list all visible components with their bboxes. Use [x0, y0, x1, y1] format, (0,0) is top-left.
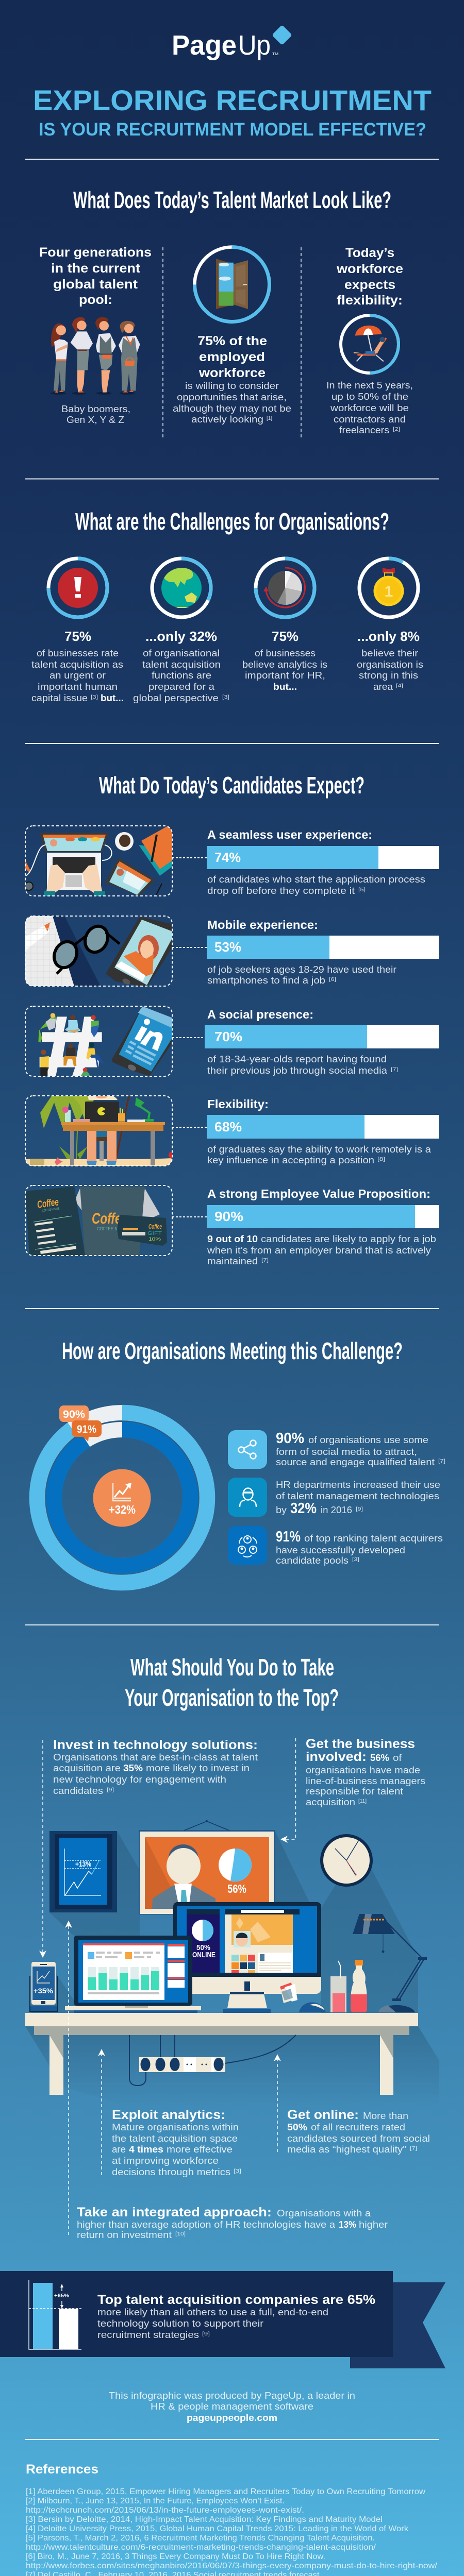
reference list: http://www.talentculture.com/6-recruitment-marketing-trends-changing-talent-acquisition/ — [26, 2543, 376, 2552]
flexibility text: up to 50% of the — [332, 392, 408, 402]
text: HR 32%: HR departments increased their use — [276, 1480, 440, 1490]
icon: pie chart ring — [256, 558, 314, 617]
75% text: an urgent or — [49, 670, 106, 681]
text: get online: candidates sourced from social — [287, 2133, 430, 2144]
text: get online: 50% — [287, 2122, 307, 2132]
heading: to the top: What Should You Do to Take — [130, 1654, 334, 1681]
illustration: coffee brand: Coffee — [92, 1210, 128, 1227]
monitor: ONLINE — [192, 1951, 216, 1959]
center badge: +32%: +32% — [109, 1503, 136, 1516]
75% analytics text: believe analytics is — [242, 659, 327, 670]
text: 91% pools: candidate pools — [276, 1555, 349, 1566]
text: EVP: maintained — [207, 1256, 258, 1266]
icon: wall clock — [322, 1836, 371, 1885]
reference list: [5] Parsons, T., March 2, 2016, 6 Recruitment Marketing Trends Changing Talent Acquisition. — [26, 2534, 375, 2543]
text: flexibility: [8] — [377, 1157, 385, 1162]
text: get online — [287, 2108, 430, 2155]
only 32% text: [3] — [222, 694, 229, 700]
text: exploit analytics — [112, 2108, 241, 2177]
illustration: coffee brand: GIFT — [147, 1231, 162, 1236]
only 32% text: of organisational — [143, 648, 220, 658]
text: get the business involved: organisations have made — [306, 1765, 420, 1775]
text: banner: more likely than all others to use a full, end-to-end — [97, 2307, 328, 2317]
callout: 91%: 91% — [77, 1423, 96, 1435]
stat: social media 90% — [228, 1430, 445, 1469]
text: invest in technology: acquisition are — [53, 1763, 121, 1773]
text: HR 32%: by — [276, 1505, 287, 1515]
75% analytics text — [242, 629, 327, 692]
arrow: business to portrait — [280, 1738, 296, 1843]
illustration: coffee brand: Coffee — [148, 1223, 162, 1230]
text: get online: [7] — [410, 2146, 417, 2151]
logo: PageUp — [172, 25, 292, 61]
text: integrated approach: Organisations with a — [277, 2208, 371, 2218]
heading: to the top: Your Organisation to the Top? — [125, 1684, 339, 1711]
75% text: 75% — [64, 629, 91, 644]
text: HR 32%: of talent management technologies — [276, 1491, 439, 1501]
flexibility text: contractors and — [334, 414, 406, 425]
section: meeting the challenge — [37, 1337, 445, 1583]
text: 90% social: 90% — [276, 1430, 304, 1447]
text: invest in technology: more likely to invest in — [146, 1763, 250, 1773]
phone on dock — [29, 1962, 58, 2012]
text: 91% pools: [3] — [352, 1557, 359, 1563]
heading: references: References — [26, 2462, 98, 2477]
employed workforce text: workforce — [198, 366, 266, 380]
text: invest in technology: candidates — [53, 1786, 103, 1796]
text: 90% social: form of social media to attract, — [276, 1447, 417, 1457]
icon: desk lamp — [353, 1914, 427, 2012]
text: get the business involved: Get the business — [306, 1737, 415, 1751]
text: HR 32% — [276, 1480, 440, 1517]
icon: medal ring: 1 — [385, 583, 393, 600]
four generations text — [39, 245, 152, 307]
75% analytics text: of businesses — [255, 648, 316, 658]
subtitle: IS YOUR RECRUITMENT MODEL EFFECTIVE? — [39, 120, 426, 140]
text: exploit analytics: Mature organisations within — [112, 2122, 239, 2132]
text: 90% social: [7] — [438, 1459, 445, 1464]
text: seamless: of candidates who start the application process — [207, 874, 425, 885]
text: exploit analytics: the talent acquisition space — [112, 2133, 238, 2144]
bar: 53%: 53% — [214, 939, 241, 955]
panel: employed workforce — [173, 247, 291, 425]
75% text: capital issue — [31, 693, 88, 703]
text: flexibility — [207, 1144, 432, 1165]
four generations text: global talent — [53, 277, 138, 292]
employed workforce text: although they may not be — [173, 403, 291, 414]
text: get the business involved: [11] — [358, 1799, 367, 1804]
heading: to the top — [125, 1654, 339, 1711]
text: get the business involved: acquisition — [306, 1797, 355, 1807]
heading: mobile: Mobile experience: — [207, 918, 318, 931]
icon: person with glasses — [228, 1478, 267, 1517]
heading: seamless: A seamless user experience: — [207, 828, 372, 841]
employed workforce text: 75% of the — [197, 334, 267, 348]
text: get online: More than — [363, 2111, 408, 2121]
only 32% text: functions are — [152, 670, 211, 681]
icon: share — [228, 1430, 267, 1469]
illustration: glasses and phone — [25, 916, 175, 987]
header: logo and title — [33, 25, 432, 140]
stat: candidate pools 91% — [228, 1526, 443, 1566]
arrow: analytics to laptop — [98, 2049, 105, 2176]
monitor: 50% — [196, 1943, 210, 1952]
text: mobile: of job seekers ages 18-29 have used their — [207, 964, 396, 975]
illustration: coffee brand: Coffee — [37, 1196, 59, 1211]
text: banner — [97, 2293, 375, 2340]
flexibility text: [2] — [393, 427, 400, 432]
reference list: http://techcrunch.com/2015/06/13/in-the-future-employees-wont-exist/. — [26, 2506, 304, 2515]
flexibility heading: expects — [344, 278, 395, 292]
generations caption: Gen X, Y & Z — [67, 415, 124, 425]
power strip and cables — [129, 2035, 296, 2086]
illustration: coffee brand: COFFEE HOUSE — [42, 1207, 60, 1213]
text: invest in technology: Invest in technology solutions: — [53, 1738, 258, 1752]
75% text: important human — [38, 682, 118, 692]
text: exploit analytics: [3] — [234, 2168, 241, 2174]
arrow: online to cable — [274, 2054, 281, 2154]
icon: globe ring — [152, 558, 211, 617]
text: flexibility: key influence in accepting a position — [207, 1155, 374, 1165]
references — [26, 2462, 438, 2576]
75% analytics text: 75% — [272, 629, 299, 644]
text: exploit analytics: Exploit analytics: — [112, 2108, 225, 2122]
illustration: beach desk — [25, 1093, 176, 1166]
bar: 74% — [207, 846, 439, 869]
flexibility text: In the next 5 years, — [326, 380, 413, 391]
heading: EVP: A strong Employee Value Proposition: — [207, 1187, 430, 1200]
illustration: laptop on desk — [25, 826, 172, 896]
75% text: but... — [101, 693, 124, 703]
desk items: mouse, drink, bottle — [280, 1960, 367, 2012]
row: mobile experience — [25, 916, 439, 987]
reference list: [1] Aberdeen Group, 2015, Empower Hiring Managers and Recruiters Today to Own Recruiting Tomorrow — [26, 2487, 425, 2496]
bar: 90%: 90% — [214, 1209, 243, 1224]
text: seamless: [5] — [358, 887, 366, 893]
row: flexibility — [25, 1093, 439, 1166]
text: HR 32%: 32% — [290, 1500, 317, 1517]
employed workforce text: [1] — [267, 416, 272, 421]
employed workforce text: actively looking — [191, 414, 263, 425]
section: take your organisation to the top — [25, 1654, 439, 2240]
only 32% text: talent acquisition — [142, 659, 221, 670]
row: seamless user experience — [25, 826, 439, 896]
text: HR 32%: in 2016 — [321, 1505, 352, 1515]
icon: beach chair in ring — [341, 315, 399, 373]
text: banner: recruitment strategies — [97, 2330, 199, 2340]
only 32% text: global perspective — [133, 693, 219, 703]
text: get the business involved: line-of-business managers — [306, 1776, 425, 1786]
text: get online: media as “highest quality” — [287, 2144, 406, 2155]
bar: 74%: 74% — [214, 850, 241, 865]
callout: 91% — [72, 1420, 102, 1442]
text: 91% pools — [276, 1529, 443, 1566]
text: seamless — [207, 874, 425, 896]
75% text: of businesses rate — [37, 648, 119, 658]
phone on dock: +35% — [34, 1987, 54, 1995]
text: integrated approach: Take an integrated approach: — [77, 2205, 272, 2219]
text: EVP — [207, 1234, 436, 1266]
illustration: coffee brand: 10% — [148, 1236, 161, 1242]
only 8% text: [4] — [396, 683, 403, 689]
employed workforce text: is willing to consider — [185, 381, 279, 391]
stat: 75% analytics — [242, 558, 327, 692]
stat: only 8% — [357, 558, 423, 692]
only 8% text: organisation is — [357, 659, 423, 670]
text: social: of 18-34-year-olds report having found — [207, 1054, 387, 1064]
only 32% text: ...only 32% — [145, 629, 217, 644]
four generations text: in the current — [51, 261, 141, 276]
chart: +65% bars: +65% — [54, 2293, 70, 2299]
stat: 75% urgent issue — [31, 558, 124, 703]
illustration: hashtag and phone — [25, 1006, 174, 1076]
reference list: [6] Biro, M., June 7, 2016, 3 Things Every Company Must Do To Hire Right Now. — [26, 2552, 325, 2561]
text: invest in technology: [9] — [107, 1787, 114, 1793]
text: get online: of all recruiters rated — [311, 2122, 405, 2132]
text: integrated approach: [10] — [175, 2231, 186, 2237]
text: 91% pools: have successfully developed — [276, 1545, 405, 1555]
reference list: http://www.forbes.com/sites/meghanbiro/2016/06/07/3-things-every-company-must-do-to-hire-right-now/ — [26, 2562, 438, 2570]
four generations text: pool: — [79, 293, 112, 307]
text: invest in technology: Organisations that are best-in-class at talent — [53, 1752, 258, 1762]
text: banner: technology solution to support their — [97, 2318, 263, 2329]
text: invest in technology — [53, 1738, 258, 1796]
reference list: [4] Deloitte University Press, 2015, Global Human Capital Trends 2015: Leading in the World of Work — [26, 2524, 409, 2533]
illustration: coffee brand: COFFEE N — [97, 1226, 118, 1231]
title: EXPLORING RECRUITMENT — [33, 84, 432, 116]
icon: open door in ring — [195, 247, 269, 321]
text: mobile: smartphones to find a job — [207, 975, 325, 986]
employed workforce text — [173, 334, 291, 425]
text: integrated approach: 13% — [339, 2219, 356, 2230]
text: social: [7] — [391, 1067, 398, 1073]
text: mobile: [6] — [329, 977, 336, 982]
icon: four women — [51, 317, 140, 395]
bar: 53% — [207, 936, 439, 959]
text: get the business involved: of — [393, 1753, 402, 1763]
text: exploit analytics: more effective — [167, 2144, 233, 2155]
text: banner: [9] — [202, 2331, 210, 2337]
75% text: talent acquisition as — [31, 659, 123, 670]
75% text: [3] — [91, 694, 98, 700]
banner: top talent companies — [0, 2271, 445, 2368]
reference list: [3] Bersin by Deloitte, 2014, High-Impact Talent Acquisition: Key Findings and Maturity Model — [26, 2515, 383, 2524]
reference list — [26, 2487, 438, 2576]
laptop — [65, 1936, 201, 2013]
text: invest in technology: new technology for engagement with — [53, 1774, 226, 1785]
text: social — [207, 1054, 398, 1076]
bar: 70%: 70% — [214, 1029, 242, 1044]
icon: people cycle — [228, 1526, 267, 1565]
flexibility text: freelancers — [339, 425, 389, 435]
center badge: +32% — [93, 1469, 151, 1527]
producer credit — [109, 2391, 355, 2423]
logo: PageUp: Up — [238, 30, 271, 61]
only 32% text: prepared for a — [148, 682, 215, 692]
frame: growth chart — [49, 1831, 117, 1912]
text: exploit analytics: decisions through metrics — [112, 2167, 230, 2177]
text: 91% pools: 91% — [276, 1529, 301, 1545]
only 32% text — [133, 629, 229, 703]
producer credit: This infographic was produced by PageUp, a leader in — [109, 2391, 355, 2401]
text: banner: Top talent acquisition companies are 65% — [97, 2293, 375, 2307]
text: 91% pools: of top ranking talent acquirers — [304, 1533, 443, 1544]
text: exploit analytics: 4 times — [129, 2144, 163, 2155]
icon: exclamation ring — [48, 558, 107, 617]
generations caption: Baby boomers, — [61, 404, 130, 414]
75% analytics text: important for HR, — [245, 670, 325, 681]
text: get online: Get online: — [287, 2108, 359, 2122]
text: EVP: candidates are likely to apply for a job — [261, 1234, 436, 1244]
reference list: [2] Milbourn, T., June 13, 2015, In the Future, Employees Won’t Exist. — [26, 2497, 285, 2505]
text: 90% social: source and engage qualified talent — [276, 1457, 435, 1467]
row: social presence — [25, 1006, 439, 1076]
bar: 70% — [205, 1025, 439, 1048]
frame: portrait with 56% pie: 56% — [227, 1882, 246, 1895]
row: employee value proposition — [25, 1185, 439, 1266]
text: get the business involved — [306, 1737, 425, 1807]
flexibility text — [326, 380, 413, 435]
text: 90% social: of organisations use some — [308, 1435, 428, 1445]
chart: donut 90% and 91% — [37, 1405, 207, 1583]
text: HR 32%: [9] — [356, 1506, 363, 1512]
text: integrated approach: higher than average adoption of HR technologies have a — [77, 2219, 336, 2230]
text: get the business involved: 56% — [370, 1753, 389, 1763]
frame: growth chart: +13% — [75, 1860, 91, 1869]
callout: 90%: 90% — [63, 1409, 85, 1420]
text: seamless: drop off before they complete it — [207, 886, 355, 896]
text: 90% social — [276, 1430, 445, 1467]
section: candidates expect — [25, 772, 439, 1266]
bar: 90% — [207, 1205, 439, 1228]
illustration: coffee brand — [25, 1185, 172, 1256]
text: social: their previous job through social media — [207, 1065, 388, 1076]
75% analytics text: but... — [273, 682, 297, 692]
only 8% text: strong in this — [359, 670, 418, 681]
text: exploit analytics: at improving workforce — [112, 2156, 219, 2166]
text: get the business involved: involved: — [306, 1750, 367, 1764]
flexibility heading: flexibility: — [337, 293, 403, 308]
chart: +65% bars — [29, 2280, 81, 2349]
stat: only 32% — [133, 558, 229, 703]
producer credit: pageuppeople.com — [187, 2413, 277, 2423]
text: invest in technology: 35% — [123, 1763, 143, 1773]
icon: medal ring — [359, 558, 418, 617]
arrow: invest to phone — [39, 1740, 46, 1958]
panel: flexibility — [326, 246, 413, 435]
four generations text: Four generations — [39, 245, 152, 260]
section: challenges — [31, 508, 423, 703]
text: EVP: when it’s from an employer brand that is actively — [207, 1245, 431, 1256]
text: integrated approach: higher — [359, 2219, 388, 2230]
text: mobile — [207, 964, 396, 986]
flexibility text: workforce will be — [330, 403, 409, 413]
panel: four generations — [39, 245, 152, 425]
callout: 90% — [59, 1405, 89, 1422]
logo: PageUp: Page — [172, 30, 237, 61]
arrow: integrated to chart — [65, 1921, 72, 2238]
illustration: desk scene — [25, 1820, 439, 2107]
section: talent market — [39, 187, 413, 438]
stat: HR departments 32% — [228, 1478, 440, 1517]
logo: PageUp: TM — [272, 53, 278, 56]
flexibility heading: workforce — [336, 262, 403, 276]
producer credit: HR & people management software — [151, 2401, 313, 2412]
only 8% text: believe their — [361, 648, 418, 658]
monitor — [173, 1902, 321, 2013]
flexibility heading: Today’s — [345, 246, 394, 260]
only 8% text: ...only 8% — [357, 629, 420, 644]
text: exploit analytics: are — [112, 2144, 126, 2155]
text: flexibility: of graduates say the ability to work remotely is a — [207, 1144, 432, 1155]
bar: 68%: 68% — [214, 1119, 242, 1134]
heading: social: A social presence: — [207, 1008, 313, 1021]
text: EVP: [7] — [261, 1258, 269, 1263]
employed workforce text: employed — [199, 350, 265, 364]
generations caption — [61, 404, 130, 425]
text: EVP: 9 out of 10 — [207, 1234, 258, 1244]
frame: portrait with 56% pie — [139, 1820, 275, 1914]
only 8% text — [357, 629, 423, 692]
only 8% text: area — [373, 682, 393, 692]
heading: flexibility: Flexibility: — [207, 1097, 269, 1111]
text: get the business involved: responsible for talent — [306, 1786, 403, 1797]
flexibility heading — [336, 246, 403, 308]
employed workforce text: opportunities that arise, — [177, 392, 287, 402]
text: integrated approach: return on investment — [77, 2230, 172, 2240]
desk — [25, 2013, 418, 2095]
bar: 68% — [207, 1115, 439, 1139]
75% text — [31, 629, 124, 703]
text: integrated approach — [77, 2205, 388, 2240]
